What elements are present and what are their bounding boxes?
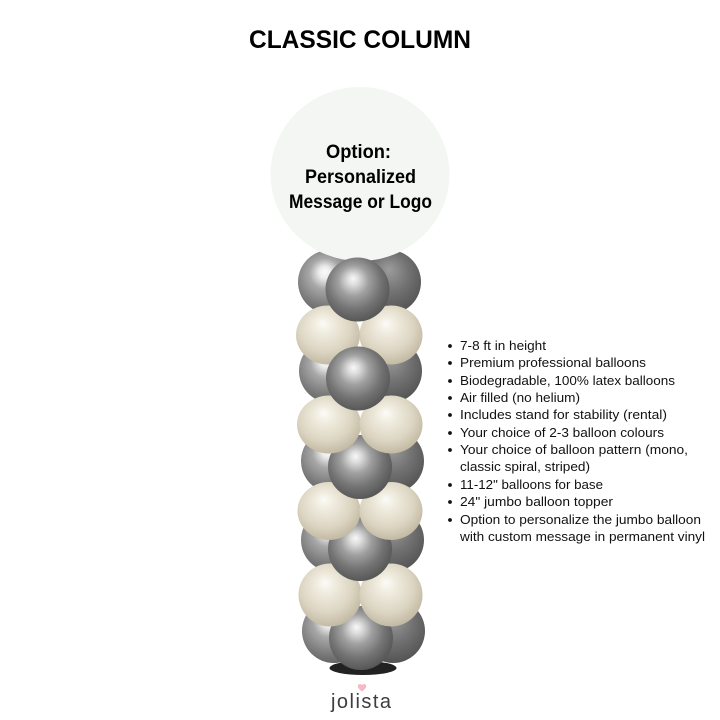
list text: 11-12" balloons for base [460, 477, 603, 492]
row 5 center silver balloon [328, 435, 392, 499]
icon: pink heart [358, 684, 366, 692]
balloon column [270, 87, 450, 675]
logo: jolista [330, 684, 392, 713]
list text: Includes stand for stability (rental) [460, 407, 667, 422]
row 3 side silver balloons [299, 339, 422, 403]
topper message: Personalized [305, 167, 416, 188]
row 6 cream balloons [298, 482, 422, 540]
list text: Your choice of 2-3 balloon colours [460, 425, 665, 440]
row 2 cream balloons [296, 306, 422, 364]
list text: classic spiral, striped) [460, 459, 590, 474]
list text: Option to personalize the jumbo balloon [460, 512, 701, 527]
list text: 7-8 ft in height [460, 338, 546, 353]
topper message: Option: [326, 142, 391, 163]
topper message [289, 142, 432, 213]
row 4 cream balloons [297, 396, 422, 454]
row 7 side silver balloons [301, 508, 424, 572]
row 5 side silver balloons [301, 429, 424, 493]
row 9 side silver balloons [302, 599, 425, 663]
list text: 24" jumbo balloon topper [460, 494, 614, 509]
list text: Premium professional balloons [460, 355, 647, 370]
row 7 center silver balloon [328, 517, 392, 581]
row 9 center silver balloon [329, 606, 393, 670]
list text: Air filled (no helium) [460, 390, 580, 405]
jumbo topper balloon [270, 87, 450, 261]
row 1 center silver balloon [326, 258, 390, 322]
feature list [448, 338, 705, 544]
list text: Biodegradable, 100% latex balloons [460, 373, 676, 388]
topper message: Message or Logo [289, 192, 432, 213]
row 1 side silver balloons [298, 250, 421, 314]
list text [459, 338, 705, 544]
row 3 center silver balloon [326, 346, 390, 410]
list text: Your choice of balloon pattern (mono, [460, 442, 688, 457]
stand base [330, 661, 396, 675]
wordmark: jolista [330, 691, 392, 713]
bullets [448, 344, 452, 522]
row 8 cream balloons [298, 564, 422, 626]
list text: with custom message in permanent vinyl [459, 529, 705, 544]
title: CLASSIC COLUMN [249, 26, 471, 54]
